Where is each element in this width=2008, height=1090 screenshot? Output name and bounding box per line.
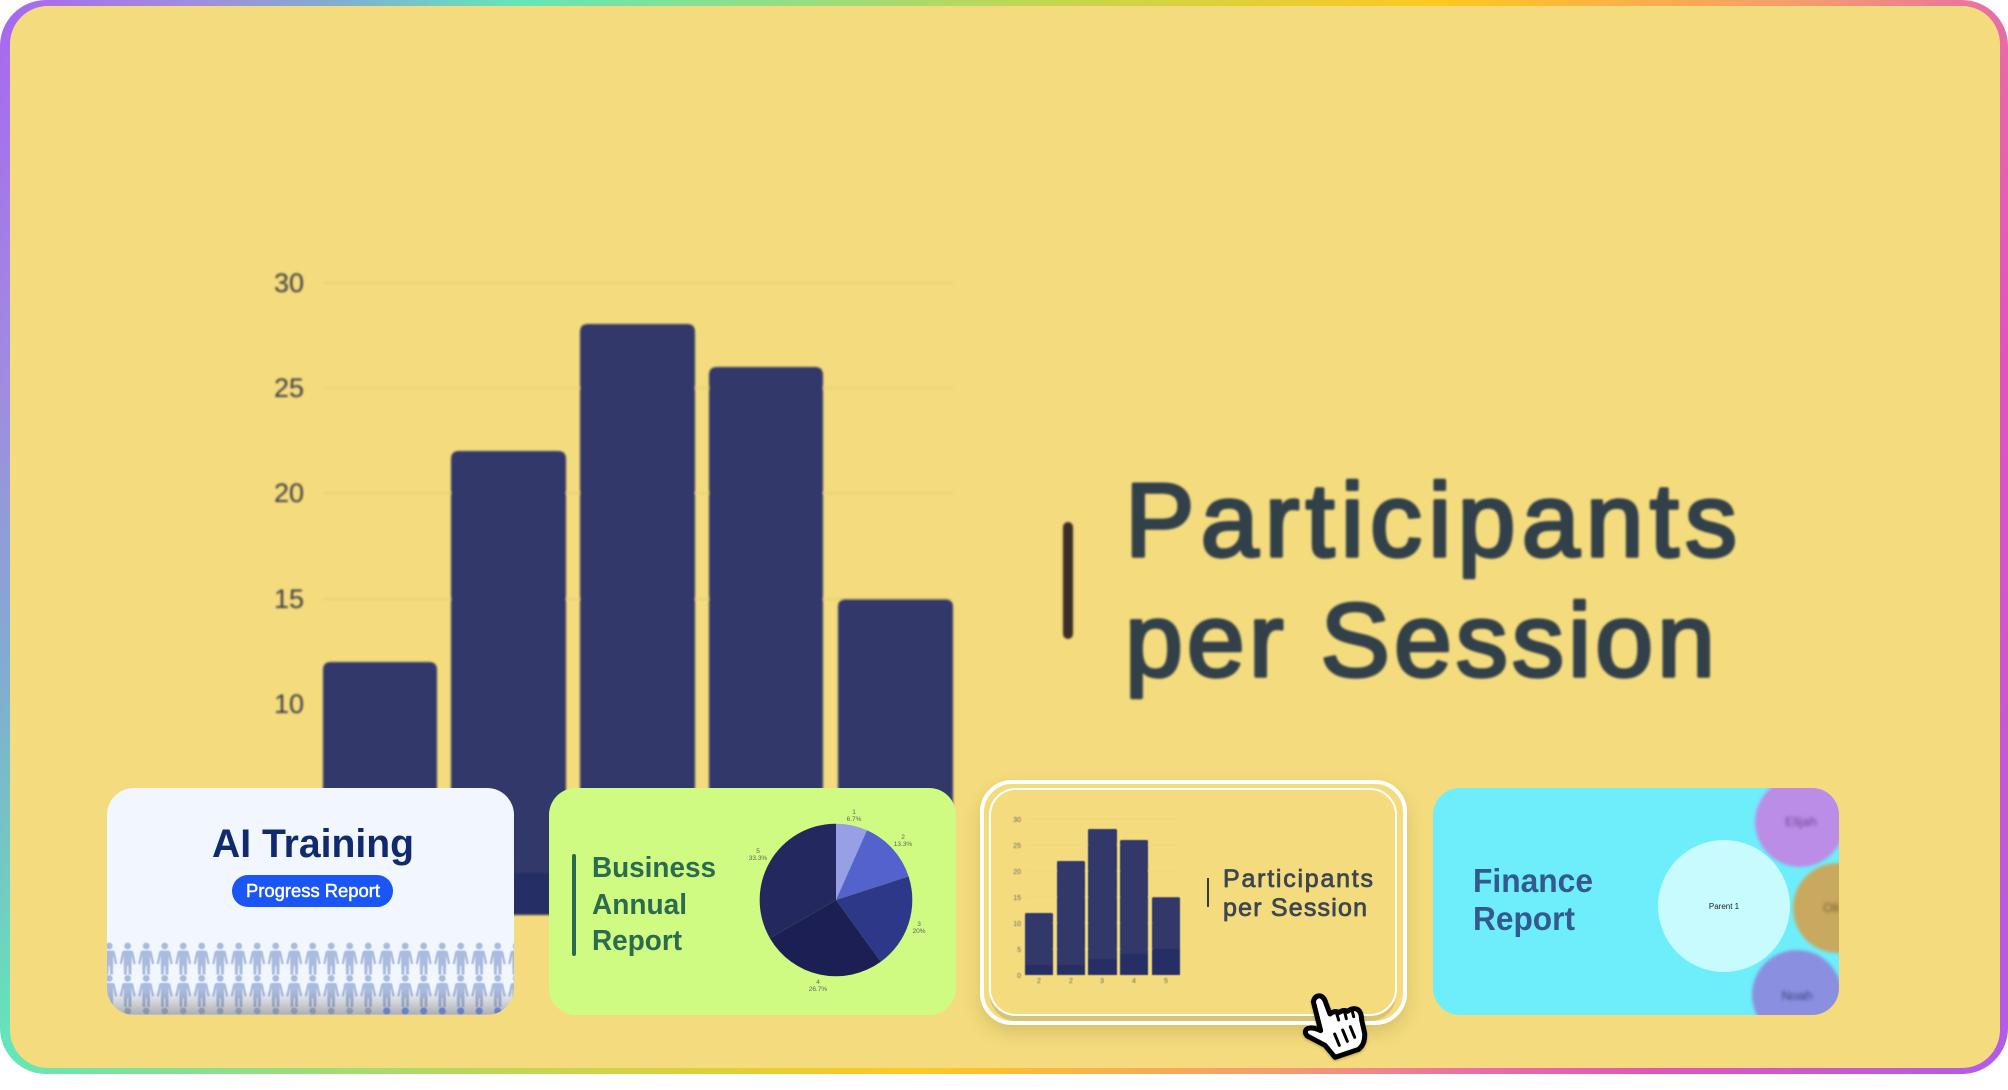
card heading: Finance [1473, 862, 1593, 899]
pill [232, 875, 393, 907]
title divider [1063, 522, 1073, 639]
large title: Participants [1125, 463, 1737, 579]
mini bar chart [1013, 817, 1180, 985]
people pattern [107, 942, 514, 1015]
bar shading [451, 873, 566, 915]
pie chart: 2 [901, 834, 905, 841]
mini bar chart: 0 [1017, 973, 1021, 980]
node circles: Elijah [1785, 814, 1817, 829]
pie chart: 33.3% [749, 855, 767, 862]
y axis labels: 20 [274, 478, 304, 508]
card: Participants per Session (selected) [982, 782, 1405, 1023]
node circles [1658, 788, 1839, 1015]
y axis labels: 15 [274, 584, 304, 614]
card heading [592, 852, 716, 957]
pie chart: 3 [917, 921, 921, 928]
y axis labels [274, 268, 304, 719]
inner card shadow band [990, 795, 1396, 1021]
pie chart: 4 [816, 979, 820, 986]
card: Business Annual Report [549, 788, 956, 1015]
large title [1063, 463, 1737, 699]
mini divider [1207, 878, 1209, 907]
card divider [572, 854, 576, 956]
card heading [1473, 862, 1593, 937]
pie chart: 6.7% [847, 816, 862, 823]
node circles: Noah [1781, 988, 1813, 1003]
node circles: Parent 1 [1709, 902, 1740, 911]
selection ring outer [982, 782, 1405, 1023]
mini bar chart: 2 [1037, 978, 1041, 985]
card: Finance Report [1433, 788, 1839, 1015]
pie chart [749, 809, 926, 993]
mini title [1223, 865, 1373, 922]
mini bar chart: 4 [1132, 978, 1136, 985]
y axis labels: 25 [274, 373, 304, 403]
pie chart: 1 [852, 809, 856, 816]
large title: per Session [1125, 583, 1715, 699]
node circles: Oli [1823, 900, 1839, 915]
mini bar chart: 25 [1013, 843, 1021, 850]
pie chart: 20% [912, 928, 926, 935]
card heading: Report [592, 925, 682, 957]
card: AI Training [107, 788, 514, 1015]
mini title: Participants [1223, 865, 1373, 893]
pill: Progress Report [246, 881, 380, 901]
large blurred bar chart [274, 268, 953, 915]
icon: hand cursor [1305, 996, 1365, 1057]
pie chart: 5 [756, 848, 760, 855]
mini bar chart: 3 [1100, 978, 1104, 985]
card heading: Annual [592, 889, 687, 921]
pie chart: 13.3% [894, 841, 912, 848]
mini bar chart: 10 [1013, 921, 1021, 928]
y axis labels: 30 [274, 268, 304, 298]
selection ring inner [990, 789, 1396, 1015]
mini bar chart: 15 [1013, 895, 1021, 902]
mini bar chart: 2 [1069, 978, 1073, 985]
card title: AI Training [212, 822, 414, 866]
mini bar chart: 5 [1017, 947, 1021, 954]
mini bar chart: 20 [1013, 869, 1021, 876]
mini bar chart: 5 [1164, 978, 1168, 985]
card heading: Business [592, 852, 716, 884]
pie chart: 26.7% [809, 986, 827, 993]
y axis labels: 10 [274, 689, 304, 719]
mini title: per Session [1223, 894, 1367, 922]
bars [323, 324, 953, 915]
mini bar chart: 30 [1013, 817, 1021, 824]
card heading: Report [1473, 900, 1575, 937]
